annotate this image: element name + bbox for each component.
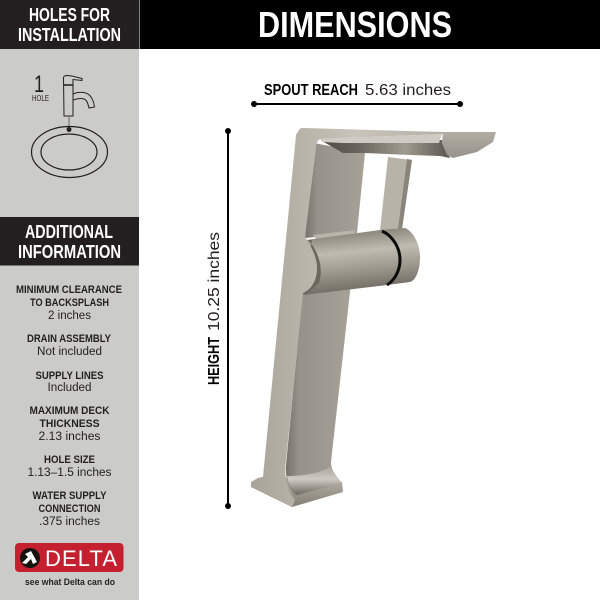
dimension: height bbox=[206, 128, 231, 509]
faucet: column and arm body bbox=[251, 128, 443, 507]
faucet: lever handle bbox=[380, 157, 412, 230]
faucet: panel lip bbox=[313, 230, 355, 242]
spec: minimum clearance: 2 inches bbox=[48, 310, 91, 322]
spec: maximum deck thickness: MAXIMUM DECK bbox=[30, 405, 110, 417]
heading band: holes for installation: HOLES FOR bbox=[29, 5, 110, 25]
panel: sidebar background bbox=[0, 0, 139, 600]
heading band: additional information bbox=[0, 217, 139, 266]
spec: drain assembly bbox=[27, 333, 112, 358]
dimension: height: HEIGHT bbox=[206, 337, 223, 385]
heading band: additional information: INFORMATION bbox=[18, 242, 121, 262]
faucet: upper panel bbox=[305, 143, 365, 238]
heading band: holes for installation bbox=[0, 0, 139, 49]
spec: water supply connection: CONNECTION bbox=[38, 503, 101, 515]
spec: minimum clearance: MINIMUM CLEARANCE bbox=[16, 284, 122, 296]
faucet: spout underside bbox=[322, 140, 450, 158]
spec: maximum deck thickness: 2.13 inches bbox=[38, 431, 101, 443]
icon: small faucet over sink bbox=[32, 76, 108, 178]
spec: maximum deck thickness: THICKNESS bbox=[40, 418, 100, 430]
faucet: lever side bbox=[398, 159, 412, 229]
spec: supply lines: Included bbox=[48, 382, 92, 394]
faucet: cylinder rim shadow bbox=[303, 240, 321, 295]
logo: Delta: see what Delta can do bbox=[25, 577, 115, 587]
spec: supply lines: SUPPLY LINES bbox=[36, 370, 104, 382]
title banner: dimensions: DIMENSIONS bbox=[258, 4, 452, 45]
heading band: additional information: ADDITIONAL bbox=[25, 222, 113, 242]
dimension: height: 10.25 inches bbox=[206, 232, 223, 331]
spec: hole size: HOLE SIZE bbox=[44, 454, 95, 466]
spec: water supply connection: WATER SUPPLY bbox=[32, 490, 107, 502]
faucet: foot plate bbox=[251, 477, 343, 507]
faucet: spout tip bbox=[442, 132, 496, 158]
spec: minimum clearance bbox=[16, 284, 122, 322]
title banner: dimensions bbox=[140, 0, 600, 49]
spec: water supply connection: .375 inches bbox=[39, 516, 100, 528]
spec: hole size bbox=[28, 454, 112, 479]
hole count bbox=[32, 71, 49, 103]
spec: water supply connection bbox=[32, 490, 107, 528]
dimension: spout reach: SPOUT REACH bbox=[264, 82, 358, 99]
spec: maximum deck thickness bbox=[30, 405, 110, 443]
spec: drain assembly: DRAIN ASSEMBLY bbox=[27, 333, 112, 345]
logo: Delta: DELTA bbox=[45, 546, 117, 571]
hole count: HOLE bbox=[32, 94, 49, 103]
faucet: black handle ring bbox=[382, 231, 400, 285]
heading band: holes for installation: INSTALLATION bbox=[18, 25, 121, 45]
spec: hole size: 1.13–1.5 inches bbox=[28, 467, 112, 479]
dimension: spout reach: 5.63 inches bbox=[365, 82, 451, 99]
faucet photo bbox=[251, 128, 496, 507]
spec: minimum clearance: TO BACKSPLASH bbox=[30, 297, 109, 309]
spec: supply lines bbox=[36, 370, 104, 394]
panel: holes for installation bbox=[0, 0, 139, 178]
spec: drain assembly: Not included bbox=[37, 346, 102, 358]
faucet: handle cylinder bbox=[303, 228, 420, 295]
dimension: spout reach bbox=[251, 82, 463, 107]
faucet: lower column panel bbox=[286, 283, 351, 496]
faucet: spout front band bbox=[320, 134, 442, 143]
faucet: base flare highlight bbox=[287, 466, 342, 495]
panel: additional information bbox=[0, 217, 139, 528]
hole count: 1 bbox=[34, 71, 44, 98]
logo: Delta bbox=[15, 543, 124, 587]
